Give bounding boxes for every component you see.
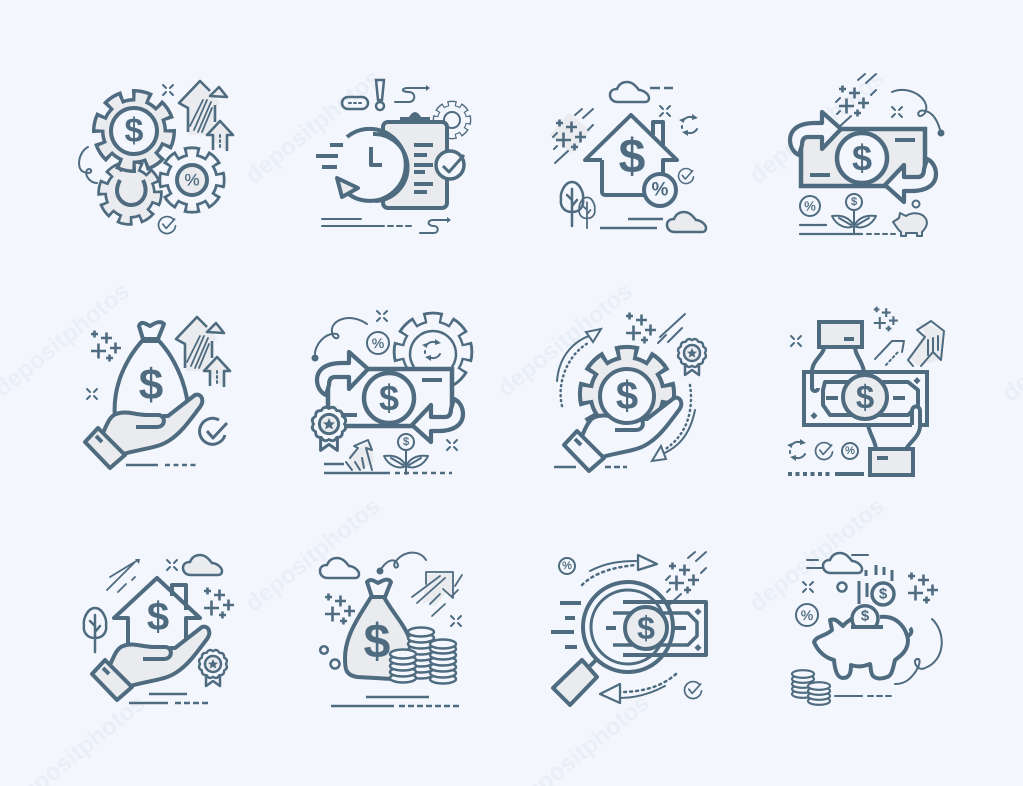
panel: money exchange	[790, 74, 944, 236]
icon: exclamation	[376, 80, 384, 110]
panel: hand money bag	[85, 317, 230, 468]
icon: arrow top	[582, 555, 657, 585]
icon: percent gear: %	[184, 170, 200, 190]
icon: plant coin: $	[403, 436, 409, 448]
icon: curl	[895, 619, 942, 684]
icon: coin stack left	[390, 650, 416, 682]
watermarks: depositphotos	[744, 64, 890, 190]
icon: dollar coin	[843, 375, 887, 419]
icon: percent	[842, 443, 858, 459]
panel: hand house	[84, 555, 234, 703]
icon: plant coin	[832, 194, 876, 234]
icon: piggy body	[814, 617, 911, 679]
icon: dollar coin: $	[637, 610, 655, 646]
icon: piggy bank	[893, 200, 927, 236]
watermarks: depositphotos	[492, 277, 638, 403]
icon: sparkles	[550, 109, 593, 163]
icon: percent	[559, 558, 575, 574]
icon: dollar gear	[91, 88, 177, 174]
icon: money bag	[115, 322, 188, 418]
icon: falling coin: $	[879, 586, 888, 602]
icon: trees	[561, 182, 595, 228]
icon: gear	[585, 352, 669, 436]
icon: house	[585, 115, 677, 195]
icon: sparkles	[908, 572, 938, 604]
icon: slot coin: $	[861, 608, 870, 624]
icon: cloud	[183, 555, 222, 575]
icon: banknote with arrows	[790, 112, 936, 202]
icon: sparkles	[626, 312, 656, 344]
icon: sparkles	[325, 594, 355, 624]
icon: spark mark	[791, 336, 801, 346]
icon: sparkles	[91, 330, 121, 362]
icon: speed lines	[316, 145, 343, 167]
icon: hand	[85, 395, 202, 468]
icon: speed lines	[551, 603, 581, 647]
icon: arrow up big	[908, 321, 944, 366]
icon: spark mark	[167, 560, 177, 570]
icon: coin stacks	[792, 670, 830, 705]
icon: check	[685, 682, 702, 699]
footer lines	[835, 695, 892, 697]
icon: percent: %	[372, 335, 384, 351]
icon: spark mark	[660, 106, 670, 116]
icon: spark mark	[87, 389, 97, 399]
icon: sparkles	[836, 74, 876, 128]
icon: banknote with arrows	[317, 352, 463, 442]
icon: house	[114, 578, 200, 650]
icon: cloud	[320, 558, 359, 578]
icon: banknote	[804, 372, 927, 425]
watermarks: depositphotos	[240, 64, 386, 190]
icon: money bag: $	[139, 360, 163, 410]
icon: rising arrows	[176, 317, 230, 388]
icon: money bag	[345, 580, 410, 680]
icon: banknote	[606, 602, 706, 655]
icon: check	[159, 217, 176, 234]
icon: sparkles	[204, 588, 234, 618]
footer lines	[800, 225, 898, 234]
icon: bubbles	[320, 646, 340, 668]
icon: cloud top	[610, 82, 649, 102]
icon: dollar coin: $	[616, 374, 638, 418]
icon: house: $	[147, 595, 169, 639]
icon: rosette	[677, 338, 707, 375]
panel: house percent	[550, 82, 706, 232]
icon: dollar gear: $	[125, 112, 144, 150]
icon: arrow up small	[875, 341, 904, 365]
icon: growth arrow	[412, 572, 462, 616]
icon: dollar coin: $	[856, 378, 874, 416]
icon: percent: %	[804, 198, 816, 214]
footer lines	[788, 472, 864, 476]
icon: rosette	[311, 406, 347, 450]
icon: check badge	[436, 151, 464, 179]
icon: rosette	[198, 649, 228, 686]
icon: squiggle with dot	[376, 553, 426, 574]
panel: piggy bank	[792, 553, 942, 705]
icon: diagonal lines	[107, 559, 140, 592]
icon: plant coin: $	[851, 196, 857, 208]
icon: check	[816, 443, 832, 460]
icon: cloud	[823, 553, 862, 573]
icon: check	[679, 169, 694, 184]
footer lines	[126, 464, 197, 466]
icon: percent badge: %	[652, 180, 669, 200]
icon: spark mark	[803, 582, 813, 592]
dashes	[807, 555, 868, 568]
icon: hand	[92, 627, 209, 700]
icon: spark mark	[163, 85, 173, 95]
icon: cloud bottom	[667, 212, 706, 232]
icon: cycle arrow right	[652, 385, 695, 461]
icon: percent	[800, 196, 820, 216]
panel: magnifier banknote	[551, 552, 706, 705]
icon: pill dashes	[342, 97, 368, 109]
icon: hand	[564, 398, 681, 471]
icon: squiggle with dot	[892, 90, 944, 136]
icon: percent: %	[845, 445, 855, 457]
icon: percent gear	[163, 151, 221, 209]
icon: percent	[796, 604, 818, 626]
icon: sparkles	[666, 552, 706, 606]
dashes	[650, 87, 673, 89]
icon: plant coin	[384, 434, 428, 474]
icon: banknote with arrows: $	[852, 138, 872, 178]
icon: percent	[367, 332, 389, 354]
icon: money bag: $	[364, 616, 391, 668]
footer lines	[129, 694, 209, 703]
footer lines	[331, 697, 462, 706]
icon: spark mark	[447, 440, 457, 450]
icon: banknote with arrows: $	[379, 378, 399, 418]
footer lines	[554, 466, 627, 468]
icon: diagonal lines	[658, 314, 685, 343]
watermarks: depositphotos	[240, 492, 386, 618]
panel: money exchange with gear	[311, 311, 468, 474]
icon: percent badge	[644, 174, 676, 206]
icon: dollar coin	[600, 369, 654, 423]
icon: slot coin	[852, 606, 878, 627]
icon: tree	[84, 608, 106, 652]
icon: falling coin	[859, 565, 894, 605]
panel: gears	[79, 81, 233, 234]
icon: sparkles	[874, 307, 898, 331]
icon: magnifier	[553, 582, 673, 705]
footer lines	[600, 219, 663, 228]
icon: squiggle arrow	[395, 85, 430, 102]
icon: cycle arrow left	[557, 329, 601, 406]
panel: hands exchanging banknote	[787, 307, 944, 475]
icon: recycle	[679, 114, 698, 136]
panel: money bag and coins	[320, 553, 462, 706]
panel: hand gear	[554, 312, 707, 471]
icon: clock arrow	[330, 127, 408, 203]
icon: loop gear	[97, 160, 163, 226]
icon: dollar coin	[625, 607, 667, 649]
icon: arrow bottom	[600, 674, 676, 703]
icon: recycle	[787, 439, 806, 461]
icon: top hand	[812, 322, 864, 391]
watermarks: depositphotos	[744, 492, 890, 618]
icon: small gear	[435, 103, 469, 137]
icon: clipboard	[383, 112, 447, 208]
icon: check	[200, 418, 227, 444]
icon: percent: %	[801, 607, 813, 623]
icon: bottom hand	[868, 406, 920, 475]
icon: squiggle with dot	[312, 318, 367, 362]
icon: large gear	[398, 317, 468, 387]
icon: arrow pictogram	[346, 440, 374, 470]
icon: curl	[79, 147, 97, 183]
icon: spark mark	[451, 616, 461, 626]
icon: coin stack middle	[408, 628, 434, 678]
icon: percent: %	[562, 560, 572, 572]
icon: spark mark	[377, 311, 387, 321]
footer lines	[324, 464, 452, 473]
icon: house: $	[619, 130, 646, 184]
icon: coin stack right	[430, 640, 456, 684]
panel: clock and clipboard	[316, 80, 469, 233]
icon: bubble	[838, 582, 846, 592]
icon: rising arrows	[179, 81, 233, 152]
icon: spark mark	[892, 107, 902, 117]
footer lines	[322, 217, 451, 233]
